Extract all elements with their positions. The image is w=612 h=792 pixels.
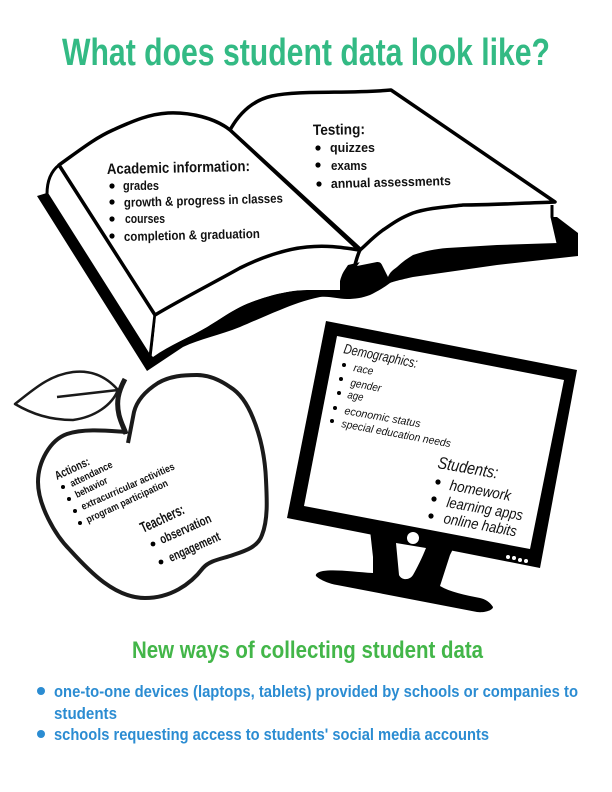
monitor text: demographics: age — [346, 389, 364, 404]
book page block: lower edge — [152, 250, 352, 356]
book left page — [59, 113, 359, 315]
apple text: actions: program participation — [85, 478, 170, 526]
book text: academic information: Academic information: — [107, 158, 250, 178]
book text: academic information — [107, 158, 283, 244]
bullet: social media: schools requesting access to students' social media accounts — [54, 725, 489, 744]
monitor base and neck — [316, 530, 493, 612]
apple text: teachers: engagement — [166, 528, 223, 565]
monitor text: students: online habits — [442, 510, 519, 540]
section heading: new ways: New ways of collecting student data — [132, 637, 484, 664]
apple text: actions: Actions: — [52, 454, 92, 483]
apple leaf — [15, 372, 118, 420]
apple text: actions — [52, 454, 177, 526]
apple text: actions: extracurricular activities — [80, 461, 177, 513]
monitor text: students: homework — [448, 477, 514, 505]
book text: testing — [313, 121, 451, 191]
apple text: teachers — [138, 501, 223, 565]
monitor text: demographics: race — [352, 362, 374, 378]
monitor text: demographics: economic status — [343, 405, 422, 430]
book page block: left — [47, 165, 155, 357]
monitor text: students: Students: — [436, 453, 500, 483]
monitor frame — [287, 321, 577, 568]
bullet: devices: students — [54, 704, 117, 723]
apple text: teachers: observation — [157, 511, 214, 547]
monitor text: students: learning apps — [445, 494, 524, 524]
monitor text: students — [428, 453, 524, 540]
book text: testing: quizzes — [330, 140, 375, 155]
book text: testing: annual assessments — [331, 173, 451, 191]
book text: testing: Testing: — [313, 121, 365, 139]
apple stem — [118, 379, 126, 434]
monitor dots — [506, 555, 528, 563]
monitor text: demographics: gender — [349, 377, 383, 395]
book page block: right — [357, 205, 558, 277]
illustration: open book — [37, 90, 578, 371]
apple text: actions: behavior — [73, 475, 110, 501]
book text: academic information: completion & graduation — [124, 226, 260, 244]
book text: testing: exams — [331, 158, 367, 173]
book right page — [230, 90, 555, 250]
monitor text: demographics: Demographics: — [342, 340, 419, 371]
bullet: devices — [37, 682, 578, 723]
monitor text: demographics: special education needs — [340, 418, 452, 450]
monitor power button — [407, 532, 419, 544]
apple text: actions: attendance — [68, 459, 115, 490]
monitor stand cutout — [396, 543, 426, 579]
apple outline — [38, 375, 267, 598]
book text: academic information: courses — [125, 211, 165, 226]
monitor text: demographics — [330, 340, 452, 450]
book shadow and cover — [37, 192, 578, 371]
book text: academic information: growth & progress in classes — [124, 191, 283, 210]
apple text: teachers: Teachers: — [138, 501, 187, 537]
bullet list: new ways — [37, 682, 578, 744]
illustration: apple — [15, 372, 267, 598]
book text: academic information: grades — [123, 178, 159, 193]
monitor screen — [304, 336, 564, 549]
illustration: computer monitor — [287, 321, 577, 612]
